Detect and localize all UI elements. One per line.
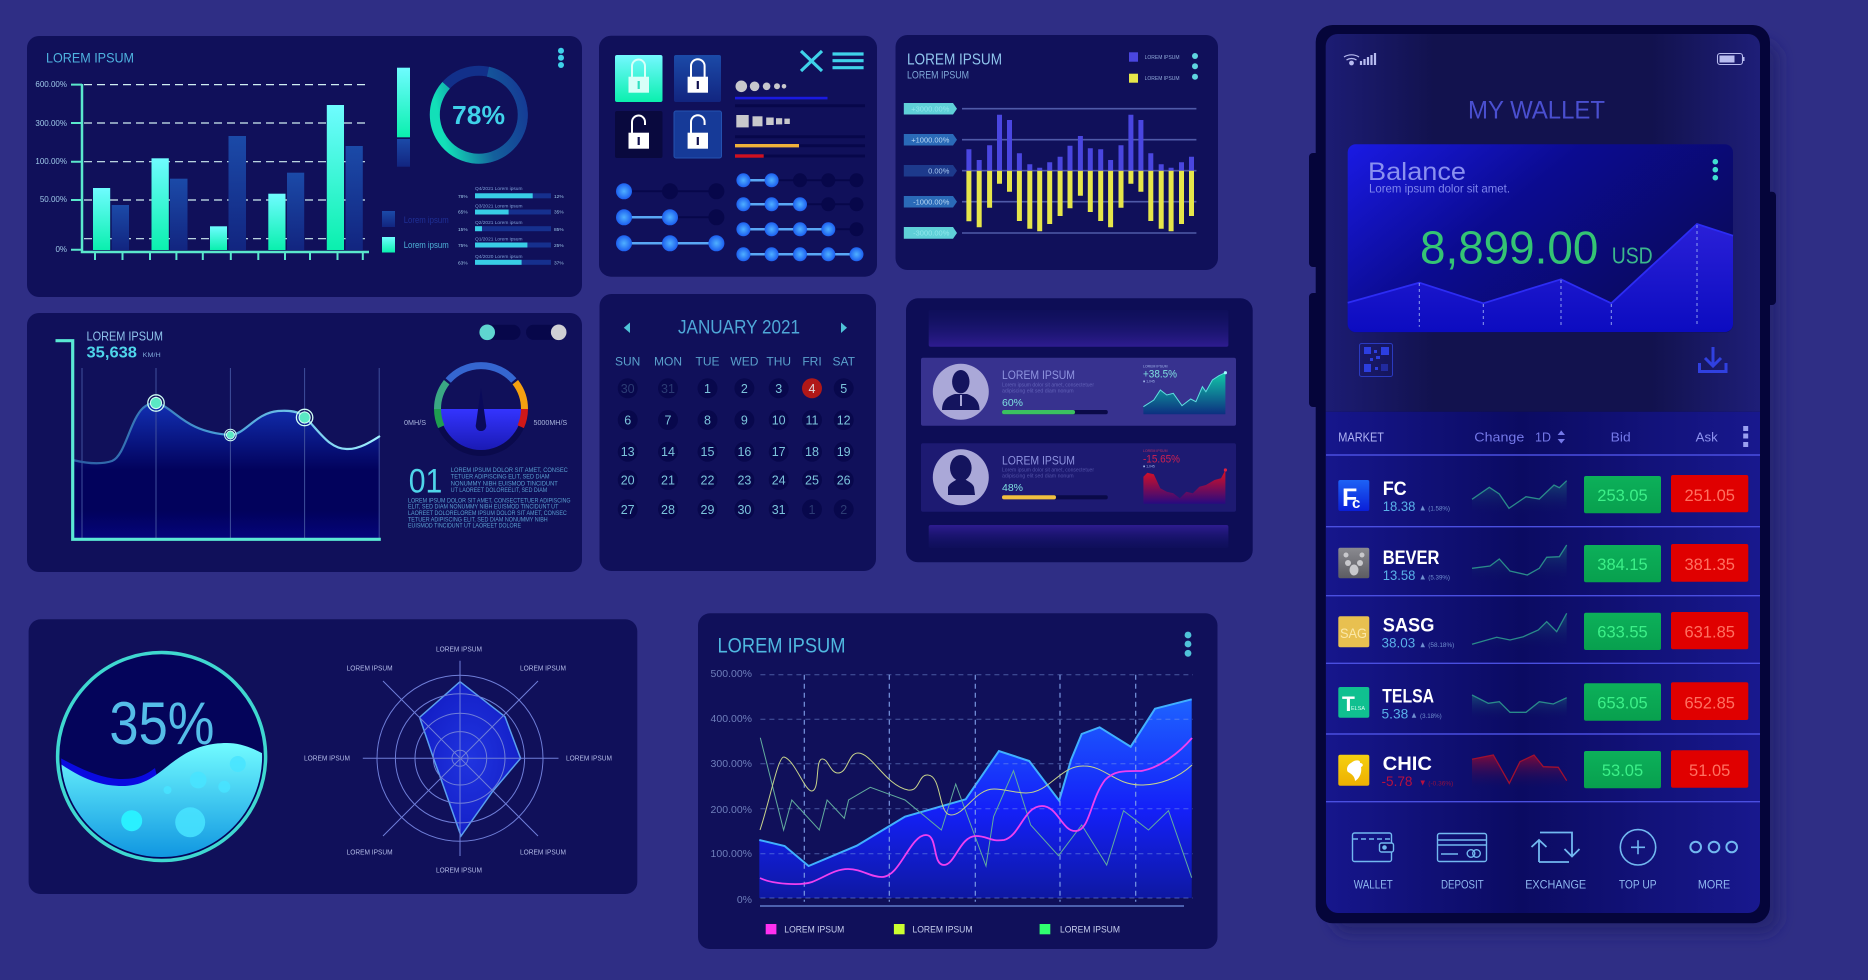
progress tracks: [735, 97, 865, 158]
icon: lock teal: [615, 55, 662, 102]
dashed gridlines: [84, 85, 369, 239]
ask: [1671, 475, 1748, 512]
description text: LAOREET DOLORELOREM IPSUM DOLOR SIT AMET, CONSEC: [408, 511, 567, 517]
quarterly progress rows: Q2/2021 Lorem ipsum: [475, 220, 522, 226]
sparkline: [1472, 695, 1567, 720]
day numbers: 28: [661, 503, 675, 517]
screen upper: [1326, 34, 1760, 412]
row: FC: (1.58%): [1428, 506, 1450, 512]
day numbers: 8: [704, 414, 711, 428]
icon: QR code: [1360, 344, 1392, 376]
row: FC: [1338, 475, 1748, 515]
day numbers: [621, 382, 851, 517]
grey squares pager: [736, 115, 790, 127]
chart vertical grid: [82, 368, 379, 538]
icon: close and menu: [801, 51, 864, 71]
quarterly progress rows: 85%: [554, 227, 564, 233]
table header: Ask: [1696, 431, 1718, 445]
day numbers: 30: [621, 382, 635, 396]
bid: [1584, 545, 1661, 582]
weekdays: [615, 354, 856, 368]
row: CHIC: (-0.36%): [1428, 782, 1453, 788]
left sliders: [616, 183, 724, 251]
user card 2: 48%: [1002, 482, 1023, 494]
logo FC: F: [1342, 484, 1357, 512]
table header: Change: [1474, 431, 1524, 445]
icon: lock blue: [674, 55, 721, 102]
speedometer gauge: [404, 366, 568, 456]
quarterly progress rows: Q4/2021 Lorem ipsum: [475, 186, 522, 192]
sparkline: [1472, 545, 1567, 583]
menu dots: [1192, 53, 1198, 80]
panel: area and line chart: [698, 613, 1218, 949]
nav: exchange: [1525, 832, 1587, 891]
description text: EUISMOD TINCIDUNT UT LAOREET DOLORE: [408, 524, 521, 530]
y axis labels: [711, 668, 752, 906]
mini chart falling: [1143, 468, 1227, 504]
description text: ELIT, SED DIAM NONUMMY NIBH EUISMOD TINCIDUNT UT: [408, 505, 559, 511]
day numbers: 6: [624, 414, 631, 428]
avatar female: [933, 449, 989, 505]
green line series: [760, 738, 1192, 878]
table header: [1338, 426, 1748, 447]
bars: blue series: [112, 136, 363, 250]
user card 2: LOREM IPSUM: [1002, 453, 1075, 467]
icon: previous arrow: [624, 322, 630, 333]
logo T: T: [1342, 693, 1355, 716]
y axis labels: 300.00%: [711, 758, 752, 770]
radar chart: [304, 645, 612, 874]
weekdays: MON: [654, 354, 682, 368]
ask: [1671, 750, 1748, 788]
user card 2: Lorem ipsum dolor sit amet, consectetuer: [1002, 468, 1094, 474]
row: CHIC: [1338, 750, 1748, 790]
table header: 1D: [1535, 431, 1551, 445]
ask: [1671, 682, 1748, 720]
legend: LOREM IPSUM: [784, 925, 844, 936]
heading: LOREM IPSUM: [718, 634, 846, 657]
day numbers: 24: [772, 474, 786, 488]
radar labels: LOREM IPSUM: [304, 753, 350, 762]
speed value: 35,638: [86, 344, 137, 361]
toggles: [479, 324, 566, 340]
quarterly progress rows: 25%: [554, 243, 564, 249]
liquid gauge 35%: [55, 652, 270, 870]
icon: next arrow: [841, 322, 847, 333]
quarterly progress rows: 65%: [458, 210, 468, 216]
day numbers: 20: [621, 474, 635, 488]
day numbers: 25: [805, 474, 819, 488]
icon: lock blue open: [674, 111, 722, 158]
speedometer gauge: 0MH/S: [404, 420, 426, 427]
day numbers: 9: [741, 414, 748, 428]
row: CHIC: CHIC: [1383, 754, 1432, 775]
description text: LOREM IPSUM DOLOR SIT AMET, CONSECTETUER ADIPISCING: [408, 498, 571, 504]
legend: [382, 211, 449, 252]
placeholder bar bottom: [929, 525, 1228, 548]
row: BEVER: 13.58: [1383, 567, 1416, 583]
logo SAG: [1338, 616, 1369, 647]
nav: deposit: DEPOSIT: [1441, 879, 1484, 891]
quarterly progress rows: Q1/2021 Lorem ipsum: [475, 236, 522, 242]
grey dots pager: [736, 80, 786, 92]
panel: user performance cards: [906, 298, 1253, 562]
radar labels: LOREM IPSUM: [347, 848, 393, 857]
logo FC: c: [1352, 495, 1360, 512]
line chart curve: [73, 403, 380, 463]
value tags: 0.00%: [928, 166, 950, 175]
phone body: [1316, 25, 1770, 923]
quarterly progress rows: Q3/2021 Lorem ipsum: [475, 204, 522, 210]
bid: 653.05: [1597, 694, 1648, 712]
dashed grid: [760, 675, 1193, 902]
phone shadow: [1332, 42, 1780, 934]
user card 1: ■ 1,045: [1143, 380, 1155, 384]
weekdays: SAT: [832, 354, 856, 368]
bars: teal series: [93, 105, 344, 250]
panel: speed line chart and gauge: [27, 313, 582, 572]
legend: LOREM IPSUM: [1145, 76, 1180, 82]
sparkline: [1472, 755, 1567, 790]
title: MY WALLET: [1468, 96, 1605, 124]
row: BEVER: [1338, 544, 1748, 583]
card menu dots: [1712, 159, 1718, 180]
day numbers: 23: [737, 474, 751, 488]
bid: [1584, 613, 1661, 650]
user card 1: LOREM IPSUM: [1002, 368, 1075, 382]
row: SASG: SASG: [1383, 616, 1434, 637]
side buttons: [1309, 153, 1776, 407]
speed value: [86, 344, 161, 361]
legend: [1129, 52, 1180, 83]
balance amount: 8,899.00: [1420, 221, 1598, 273]
day numbers: 2: [840, 503, 847, 517]
day numbers: 3: [775, 382, 782, 396]
weekdays: WED: [730, 354, 759, 368]
y axis labels: 400.00%: [711, 713, 752, 725]
bid: [1584, 683, 1661, 721]
radar labels: LOREM IPSUM: [520, 848, 566, 857]
day numbers: 16: [737, 445, 751, 459]
balance area chart: [1348, 224, 1733, 332]
user card 1: [921, 358, 1236, 426]
row: FC: 18.38: [1383, 498, 1416, 514]
user card 2: LOREM IPSUM: [1143, 449, 1168, 453]
ask: [1671, 612, 1748, 649]
panel: diverging bar chart: [896, 35, 1218, 270]
day numbers: 10: [772, 414, 786, 428]
user card 2: adipiscing elit sed diam nonum: [1002, 474, 1074, 480]
day numbers: 4: [809, 382, 816, 396]
y axis labels: 100.00%: [35, 157, 67, 166]
quarterly progress rows: 15%: [458, 227, 468, 233]
day circles: [618, 378, 854, 519]
radar labels: [304, 645, 612, 874]
screen lower: [1326, 412, 1760, 913]
description text: TETUER ADIPISCING ELIT, SED DIAM: [451, 475, 550, 481]
description text: TETUER ADIPISCING ELIT, SED DIAM NONUMMY NIBH: [408, 517, 548, 523]
balance heading: Balance: [1368, 158, 1466, 186]
day numbers: 19: [837, 445, 851, 459]
day numbers: 1: [704, 382, 711, 396]
legend: Lorem ipsum: [404, 240, 449, 250]
legend: [766, 924, 1120, 936]
icon: lock dark open: [615, 111, 662, 158]
user card 1: adipiscing elit sed diam nonum: [1002, 388, 1074, 394]
currency: USD: [1612, 242, 1653, 268]
bid: [1584, 751, 1661, 788]
nav: deposit: [1438, 834, 1486, 891]
placeholder bar top: [929, 310, 1228, 347]
nav: wallet: [1352, 833, 1394, 891]
description text: LOREM IPSUM DOLOR SIT AMET, CONSEC: [451, 468, 568, 474]
y axis labels: 300.00%: [35, 119, 67, 128]
radar labels: LOREM IPSUM: [436, 645, 482, 654]
bars: yellow downward: [969, 171, 1192, 231]
row: TELSA: [1338, 682, 1748, 721]
y axis labels: 100.00%: [711, 848, 752, 860]
day numbers: 30: [737, 503, 751, 517]
blue area series: [759, 699, 1192, 898]
ask: 652.85: [1684, 694, 1735, 712]
gridlines: [962, 109, 1196, 233]
table header: Bid: [1611, 431, 1631, 445]
legend: LOREM IPSUM: [912, 925, 973, 936]
row: BEVER: BEVER: [1383, 548, 1440, 569]
number 01: 01: [409, 463, 442, 501]
day numbers: 22: [701, 474, 714, 488]
logo SAG: SAG: [1340, 625, 1367, 641]
liquid gauge 35%: 35%: [109, 690, 214, 757]
row: TELSA: (3.18%): [1420, 714, 1442, 720]
balance card: [1348, 144, 1733, 332]
ask: 251.05: [1684, 487, 1735, 505]
y axis labels: 600.00%: [35, 80, 67, 89]
logo T: ELSA: [1351, 706, 1365, 712]
legend: LOREM IPSUM: [1060, 925, 1120, 936]
y axis labels: 500.00%: [711, 668, 752, 680]
user card 1: LOREM IPSUM: [1143, 364, 1168, 368]
menu dots: [1185, 632, 1191, 657]
logo rooster: [1338, 755, 1369, 786]
day numbers: 27: [621, 503, 635, 517]
chart axes: [71, 84, 369, 260]
nav: more: MORE: [1698, 879, 1730, 891]
weekdays: TUE: [696, 354, 720, 368]
calendar title: JANUARY 2021: [678, 317, 800, 338]
description text: NONUMMY NIBH EUISMOD TINCIDUNT: [451, 481, 558, 487]
line chart area: [73, 403, 380, 538]
nav: top up: TOP UP: [1619, 879, 1657, 891]
legend: LOREM IPSUM: [1145, 55, 1180, 61]
bid: 384.15: [1597, 556, 1648, 574]
description text: UT LAOREET DOLOREELIT, SED DIAM: [451, 488, 547, 494]
bars: blue upward: [969, 115, 1192, 171]
panel: locks and sliders: [599, 36, 877, 277]
panel: bar chart: [27, 36, 582, 297]
icon: battery: [1718, 54, 1744, 64]
quarterly progress rows: 78%: [458, 194, 468, 200]
panel: calendar: [600, 294, 876, 571]
quarterly progress rows: 12%: [554, 194, 564, 200]
day numbers: 18: [805, 445, 819, 459]
row: SASG: 38.03: [1382, 635, 1415, 651]
donut gauge 78%: 78%: [452, 100, 505, 130]
avatar male: [933, 364, 989, 420]
ask: 631.85: [1684, 624, 1735, 642]
day numbers: 17: [772, 445, 786, 459]
day numbers: 13: [621, 445, 635, 459]
quarterly progress rows: 63%: [458, 260, 468, 266]
donut gauge 78%: [435, 71, 523, 159]
row: CHIC: -5.78: [1382, 773, 1413, 789]
weekdays: THU: [766, 354, 791, 368]
logo FC: [1338, 480, 1369, 512]
speed value: KM/H: [143, 352, 161, 359]
bid: [1584, 476, 1661, 513]
user card 1: Lorem ipsum dolor sit amet, consectetuer: [1002, 382, 1094, 388]
day numbers: 11: [806, 414, 819, 428]
magenta line series: [760, 738, 1192, 884]
row dividers: [1326, 455, 1760, 802]
table header: MARKET: [1338, 431, 1384, 445]
yellow line series: [760, 753, 1192, 830]
nav: more: [1690, 842, 1737, 891]
day numbers: 5: [840, 382, 847, 396]
bid: 633.55: [1597, 624, 1648, 642]
bid: 53.05: [1602, 762, 1643, 780]
ask: [1671, 544, 1748, 582]
quarterly progress rows: 37%: [554, 260, 564, 266]
radar labels: LOREM IPSUM: [347, 664, 393, 673]
user card 1: 60%: [1002, 397, 1023, 409]
logo T: [1338, 687, 1369, 718]
panel: liquid gauge and radar chart: [29, 619, 637, 894]
subheading: LOREM IPSUM: [907, 69, 969, 81]
radar labels: LOREM IPSUM: [436, 865, 482, 874]
quarterly progress rows: Q4/2020 Lorem ipsum: [475, 254, 522, 260]
y axis labels: 0%: [737, 894, 752, 906]
quarterly progress rows: 35%: [554, 210, 564, 216]
row: FC: FC: [1383, 479, 1407, 500]
phone mockup: wallet app: [1309, 25, 1780, 934]
heading: LOREM IPSUM: [86, 330, 163, 344]
area top edge: [759, 699, 1192, 866]
legend: Lorem ipsum: [404, 215, 449, 225]
logo bear: [1338, 548, 1369, 578]
day numbers: 1: [809, 503, 816, 517]
y axis labels: 200.00%: [711, 804, 752, 816]
user card 2: -15.65%: [1143, 453, 1180, 465]
day numbers: 29: [701, 503, 714, 517]
y axis labels: 50.00%: [40, 195, 67, 204]
speedometer gauge: 5000MH/S: [534, 420, 568, 427]
value tags: -3000.00%: [913, 229, 950, 238]
ask: 381.35: [1684, 556, 1735, 574]
row: SASG: [1338, 612, 1748, 651]
user card 2: ■ 1,045: [1143, 464, 1155, 468]
weekdays: SUN: [615, 354, 640, 368]
value tags: +1000.00%: [911, 135, 950, 144]
radar labels: LOREM IPSUM: [566, 753, 612, 762]
y axis labels: 0%: [55, 245, 67, 254]
row: TELSA: TELSA: [1382, 686, 1434, 707]
user card 2: [921, 443, 1236, 512]
day numbers: 26: [837, 474, 851, 488]
right sliders: [736, 173, 864, 261]
mini chart rising: [1143, 371, 1227, 414]
day numbers: 31: [772, 503, 786, 517]
y axis labels: [35, 80, 67, 254]
sparkline: [1472, 613, 1567, 650]
day numbers: 21: [661, 474, 675, 488]
nav: exchange: EXCHANGE: [1525, 879, 1587, 891]
vertical level bar: [397, 68, 410, 167]
row: BEVER: (5.39%): [1428, 576, 1450, 582]
day numbers: 12: [837, 414, 851, 428]
icon: wifi and signal: [1344, 53, 1375, 65]
quarterly progress rows: [458, 186, 564, 266]
day numbers: 7: [665, 414, 672, 428]
row: TELSA: 5.38: [1382, 705, 1408, 721]
ask: 51.05: [1689, 762, 1730, 780]
row: SASG: (58.18%): [1428, 643, 1454, 649]
day numbers: 14: [661, 445, 675, 459]
day numbers: 15: [701, 445, 714, 459]
radar labels: LOREM IPSUM: [520, 664, 566, 673]
value tags: +3000.00%: [911, 104, 950, 113]
menu dots: [558, 48, 564, 68]
value tags: -1000.00%: [913, 197, 950, 206]
quarterly progress rows: 75%: [458, 243, 468, 249]
value tags: [904, 103, 957, 239]
heading: LOREM IPSUM: [46, 50, 134, 66]
nav: wallet: WALLET: [1354, 879, 1393, 891]
bid: 253.05: [1597, 487, 1648, 505]
day numbers: 2: [741, 382, 748, 396]
description text: [408, 468, 571, 530]
heading: LOREM IPSUM: [907, 51, 1002, 68]
day numbers: 31: [661, 382, 675, 396]
balance subtitle: Lorem ipsum dolor sit amet.: [1369, 182, 1510, 196]
chart frame: [56, 341, 381, 539]
nav: top up: [1619, 830, 1657, 891]
icon: download: [1700, 347, 1726, 372]
user card 1: +38.5%: [1143, 369, 1177, 381]
data markers: [148, 395, 313, 441]
sparkline: [1472, 481, 1567, 515]
baseline: [760, 905, 1184, 907]
weekdays: FRI: [802, 354, 822, 368]
